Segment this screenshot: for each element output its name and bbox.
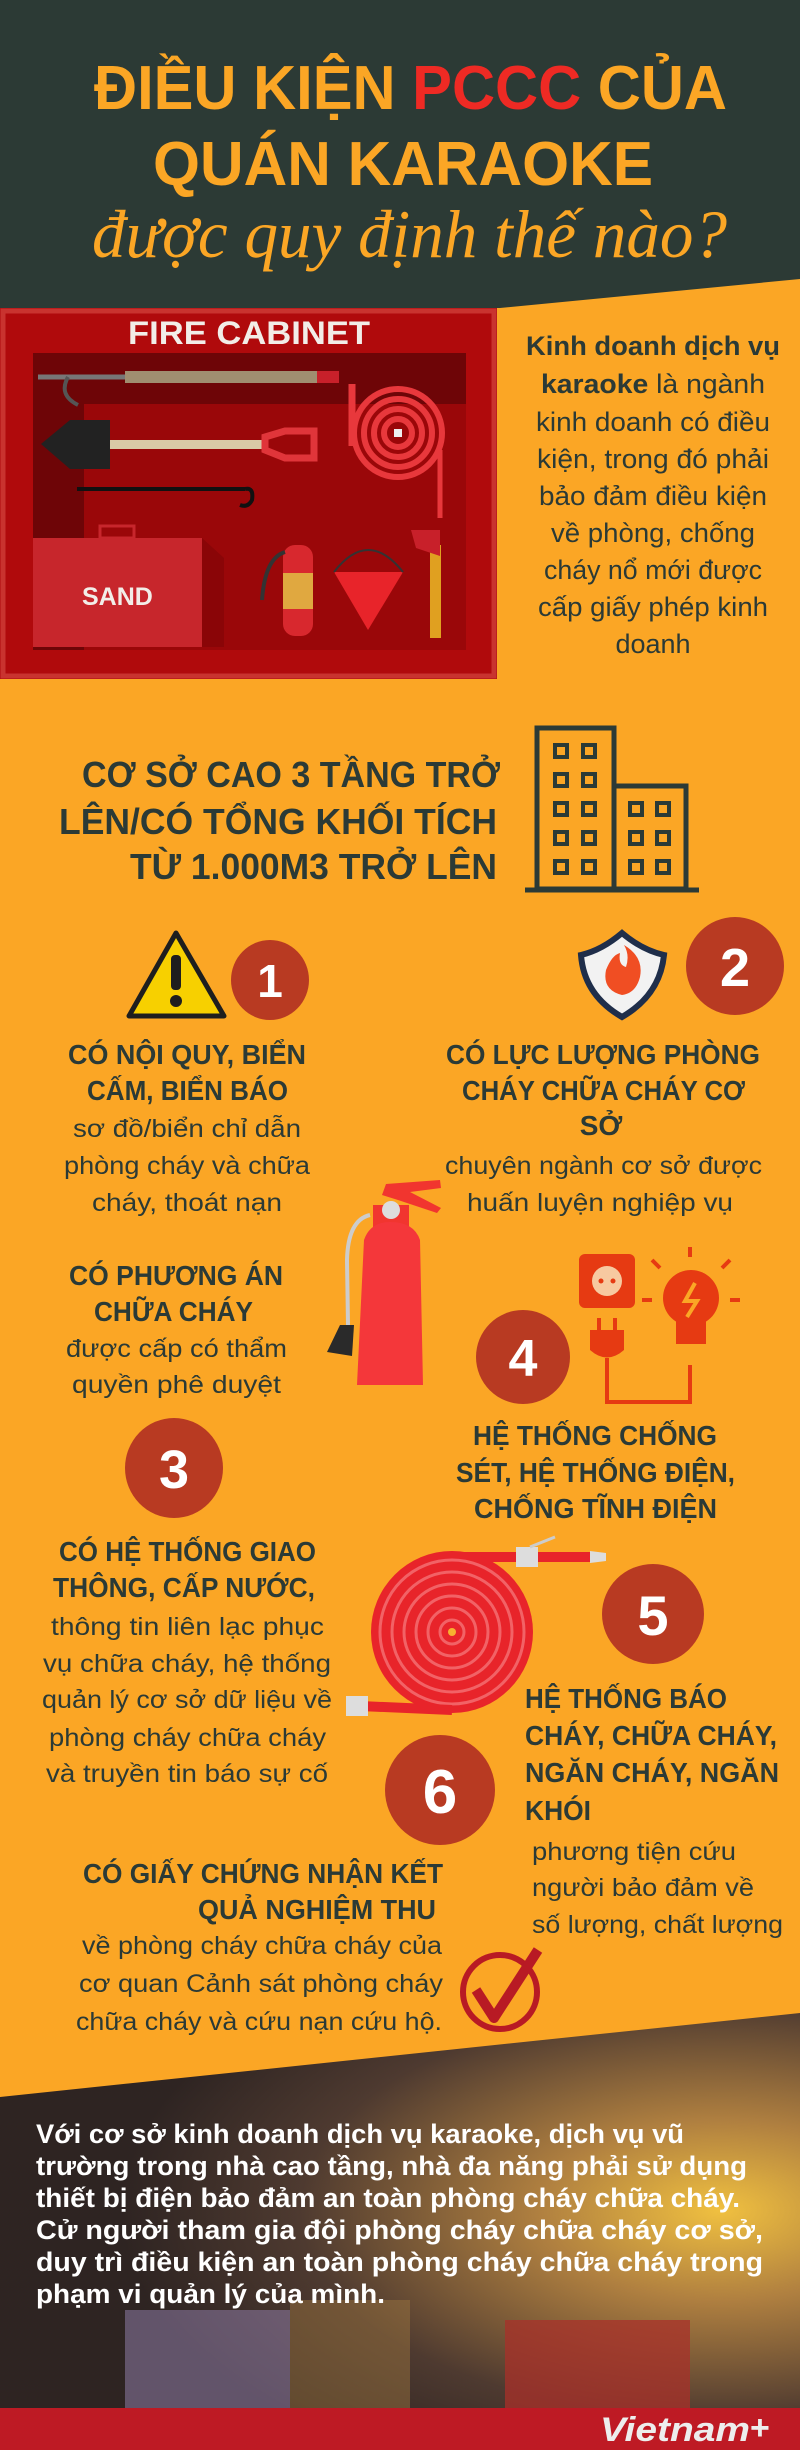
item 5 text: CHÁY, CHỮA CHÁY,	[525, 1720, 777, 1751]
item: phuong an chua chay text: CHỮA CHÁY	[94, 1296, 253, 1327]
fire cabinet illustration: SAND	[82, 583, 153, 611]
item 6 text: CÓ GIẤY CHỨNG NHẬN KẾT	[83, 1858, 443, 1889]
item 6 text	[76, 1858, 444, 2036]
item 5 text: phương tiện cứu	[532, 1838, 736, 1866]
intro text: doanh	[615, 629, 691, 659]
bottom paragraph: trường trong nhà cao tầng, nhà đa năng phải sử dụng	[36, 2151, 747, 2181]
item 3 text: THÔNG, CẤP NƯỚC,	[53, 1571, 315, 1603]
fire cabinet illustration: FIRE CABINET	[128, 315, 370, 351]
item: phuong an chua chay text: quyền phê duyệt	[72, 1371, 281, 1399]
item 2 text: CÓ LỰC LƯỢNG PHÒNG	[446, 1039, 760, 1070]
item 2 text: huấn luyện nghiệp vụ	[467, 1189, 733, 1217]
bottom paragraph: phạm vi quản lý của mình.	[36, 2279, 385, 2309]
item: phuong an chua chay text	[66, 1260, 287, 1399]
item 4 text: SÉT, HỆ THỐNG ĐIỆN,	[456, 1456, 735, 1488]
footer bar: +	[750, 2409, 770, 2447]
badge 5	[602, 1564, 704, 1664]
badge 1	[231, 940, 309, 1020]
intro text: kinh doanh có điều	[536, 407, 770, 437]
item 6 text: QUẢ NGHIỆM THU	[198, 1893, 436, 1925]
badge 2	[686, 917, 784, 1015]
fire cabinet illustration	[0, 308, 497, 679]
item 5 text: NGĂN CHÁY, NGĂN	[525, 1757, 779, 1788]
icon: fire hose reel	[346, 1537, 606, 1716]
badge 6	[385, 1735, 495, 1845]
sand box	[33, 538, 202, 647]
item 5 text: người bảo đảm về	[532, 1874, 754, 1902]
badge 4: 4	[509, 1330, 538, 1388]
item 3 text	[42, 1535, 332, 1788]
item 1 text: phòng cháy và chữa	[64, 1152, 310, 1180]
item 1 text: sơ đồ/biển chỉ dẫn	[73, 1114, 301, 1143]
title: ĐIỀU KIỆN PCCC CỦA	[94, 54, 727, 123]
item 4 text: CHỐNG TĨNH ĐIỆN	[474, 1492, 717, 1524]
intro text: Kinh doanh dịch vụ	[526, 331, 780, 361]
item 6 text: về phòng cháy chữa cháy của	[82, 1932, 442, 1960]
item 5 text: HỆ THỐNG BÁO	[525, 1682, 727, 1714]
section heading	[59, 753, 500, 887]
item 3 text: vụ chữa cháy, hệ thống	[43, 1650, 331, 1678]
intro text: cháy nổ mới được	[544, 555, 762, 585]
item 3 text: phòng cháy chữa cháy	[49, 1724, 327, 1752]
item 4 text	[456, 1419, 735, 1524]
badge 1: 1	[257, 955, 283, 1007]
shovel	[41, 420, 110, 469]
hook pole	[38, 374, 130, 380]
bottom paragraph: Cử người tham gia đội phòng cháy chữa cháy cơ sở,	[36, 2215, 763, 2245]
intro text: karaoke là ngành	[541, 369, 765, 399]
footer bar: Vietnam	[600, 2411, 750, 2449]
icon: warning triangle	[129, 933, 224, 1016]
intro text: về phòng, chống	[551, 518, 755, 548]
bottom paragraph	[36, 2119, 763, 2309]
intro text: kiện, trong đó phải	[537, 444, 769, 474]
item 6 text: chữa cháy và cứu nạn cứu hộ.	[76, 2008, 442, 2036]
intro text: cấp giấy phép kinh	[538, 592, 768, 622]
item 1 text: CẤM, BIỂN BÁO	[87, 1075, 288, 1106]
intro text: bảo đảm điều kiện	[539, 481, 767, 511]
header background	[0, 0, 800, 308]
intro text	[526, 331, 780, 659]
item 2 text	[445, 1039, 762, 1217]
item 1 text	[64, 1038, 310, 1217]
photo background	[0, 2013, 800, 2408]
item 4 text: HỆ THỐNG CHỐNG	[473, 1419, 717, 1451]
title	[92, 54, 727, 272]
item 5 text: KHÓI	[525, 1795, 591, 1826]
bottom paragraph: duy trì điều kiện an toàn phòng cháy chữa cháy trong	[36, 2247, 763, 2277]
badge 2: 2	[720, 938, 750, 998]
item 3 text: CÓ HỆ THỐNG GIAO	[59, 1535, 316, 1567]
bucket	[334, 572, 403, 630]
item 2 text: chuyên ngành cơ sở được	[445, 1152, 762, 1180]
bottom paragraph: Với cơ sở kinh doanh dịch vụ karaoke, dịch vụ vũ	[36, 2119, 684, 2149]
icon: check mark circle	[463, 1950, 538, 2029]
bottom paragraph: thiết bị điện bảo đảm an toàn phòng cháy chữa cháy.	[36, 2183, 740, 2213]
item: phuong an chua chay text: CÓ PHƯƠNG ÁN	[69, 1260, 283, 1291]
item 5 text: số lượng, chất lượng	[532, 1911, 783, 1939]
item 6 text: cơ quan Cảnh sát phòng cháy	[79, 1970, 444, 1998]
section heading: CƠ SỞ CAO 3 TẦNG TRỞ	[82, 753, 500, 795]
badge 3	[125, 1418, 223, 1518]
icon: shield with flame	[581, 933, 664, 1017]
icon: building	[525, 728, 699, 890]
badge 3: 3	[159, 1440, 189, 1500]
badge 4	[476, 1310, 570, 1404]
section heading: LÊN/CÓ TỔNG KHỐI TÍCH	[59, 799, 497, 842]
extinguisher small	[283, 545, 313, 636]
item 2 text: SỞ	[580, 1109, 622, 1141]
item 1 text: cháy, thoát nạn	[92, 1189, 282, 1217]
item 5 text	[525, 1682, 783, 1939]
title: được quy định thế nào?	[92, 196, 727, 272]
icon: fire extinguisher	[327, 1180, 441, 1385]
title: QUÁN KARAOKE	[153, 130, 653, 199]
item 3 text: và truyền tin báo sự cố	[46, 1760, 328, 1788]
hook bar	[77, 487, 245, 491]
item 3 text: thông tin liên lạc phục	[51, 1613, 324, 1641]
item 3 text: quản lý cơ sở dữ liệu về	[42, 1686, 332, 1714]
axe	[430, 545, 441, 638]
item 1 text: CÓ NỘI QUY, BIỂN	[68, 1038, 306, 1070]
badge 5: 5	[637, 1584, 669, 1647]
item: phuong an chua chay text: được cấp có thẩm	[66, 1335, 287, 1363]
section heading: TỪ 1.000M3 TRỞ LÊN	[130, 845, 497, 887]
item 2 text: CHÁY CHỮA CHÁY CƠ	[462, 1075, 745, 1106]
hose coil	[354, 389, 442, 477]
icon: plug and bulb	[579, 1247, 740, 1402]
badge 6: 6	[423, 1758, 457, 1827]
footer bar	[0, 2408, 800, 2450]
